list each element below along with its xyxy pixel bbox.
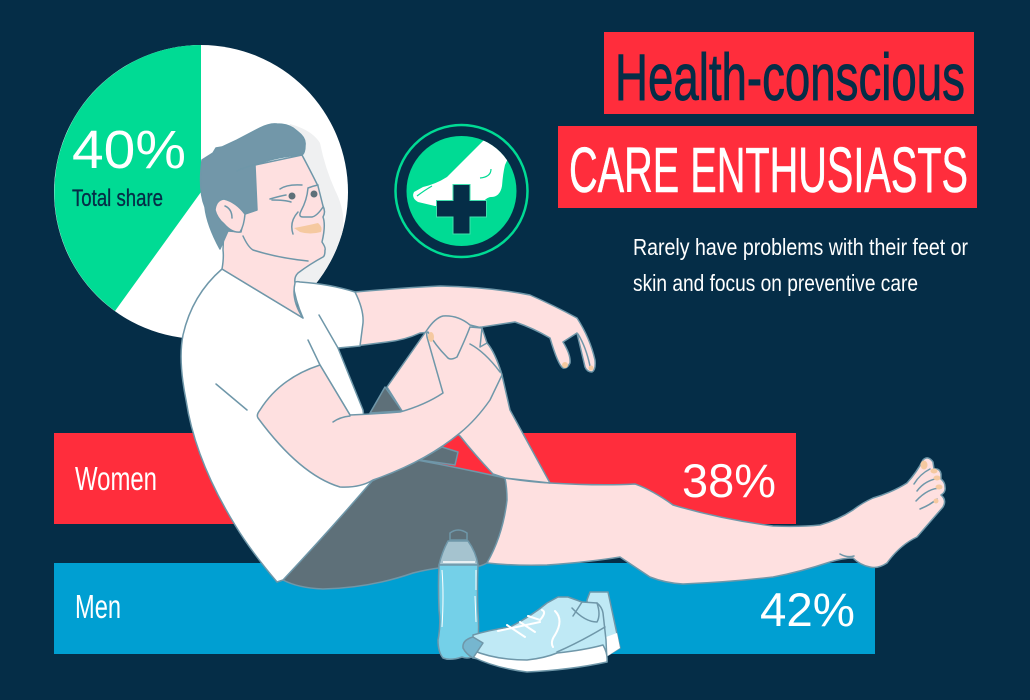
bar: women 38%: Women <box>75 460 157 497</box>
bottle <box>438 530 479 659</box>
back arm and hand <box>340 286 595 372</box>
description <box>633 234 968 296</box>
raised leg <box>387 316 550 483</box>
pie value: 40% <box>72 120 186 180</box>
description: skin and focus on preventive care <box>633 270 918 296</box>
pie label: Total share <box>72 185 163 212</box>
straight leg and foot <box>487 458 945 584</box>
facial features <box>243 185 323 261</box>
head: neck and face <box>222 155 325 318</box>
hair <box>201 124 305 249</box>
shorts <box>283 460 508 589</box>
ear <box>215 199 245 232</box>
bar: women 38%: 38% <box>682 454 776 507</box>
front arm and hand <box>257 327 502 487</box>
description: Rarely have problems with their feet or <box>633 234 968 260</box>
shirt <box>181 269 372 582</box>
pie chart: total share <box>54 45 348 339</box>
bar: men 42%: 42% <box>760 583 855 636</box>
bar: women 38% <box>54 433 796 524</box>
bar: men 42% <box>54 563 875 654</box>
illustration: seated man <box>181 124 945 672</box>
toenails <box>920 460 942 504</box>
icon: foot with medical cross <box>396 125 528 257</box>
bar: men 42%: Men <box>75 588 121 625</box>
running shoes <box>463 592 620 672</box>
toe and fingernails <box>562 362 594 370</box>
